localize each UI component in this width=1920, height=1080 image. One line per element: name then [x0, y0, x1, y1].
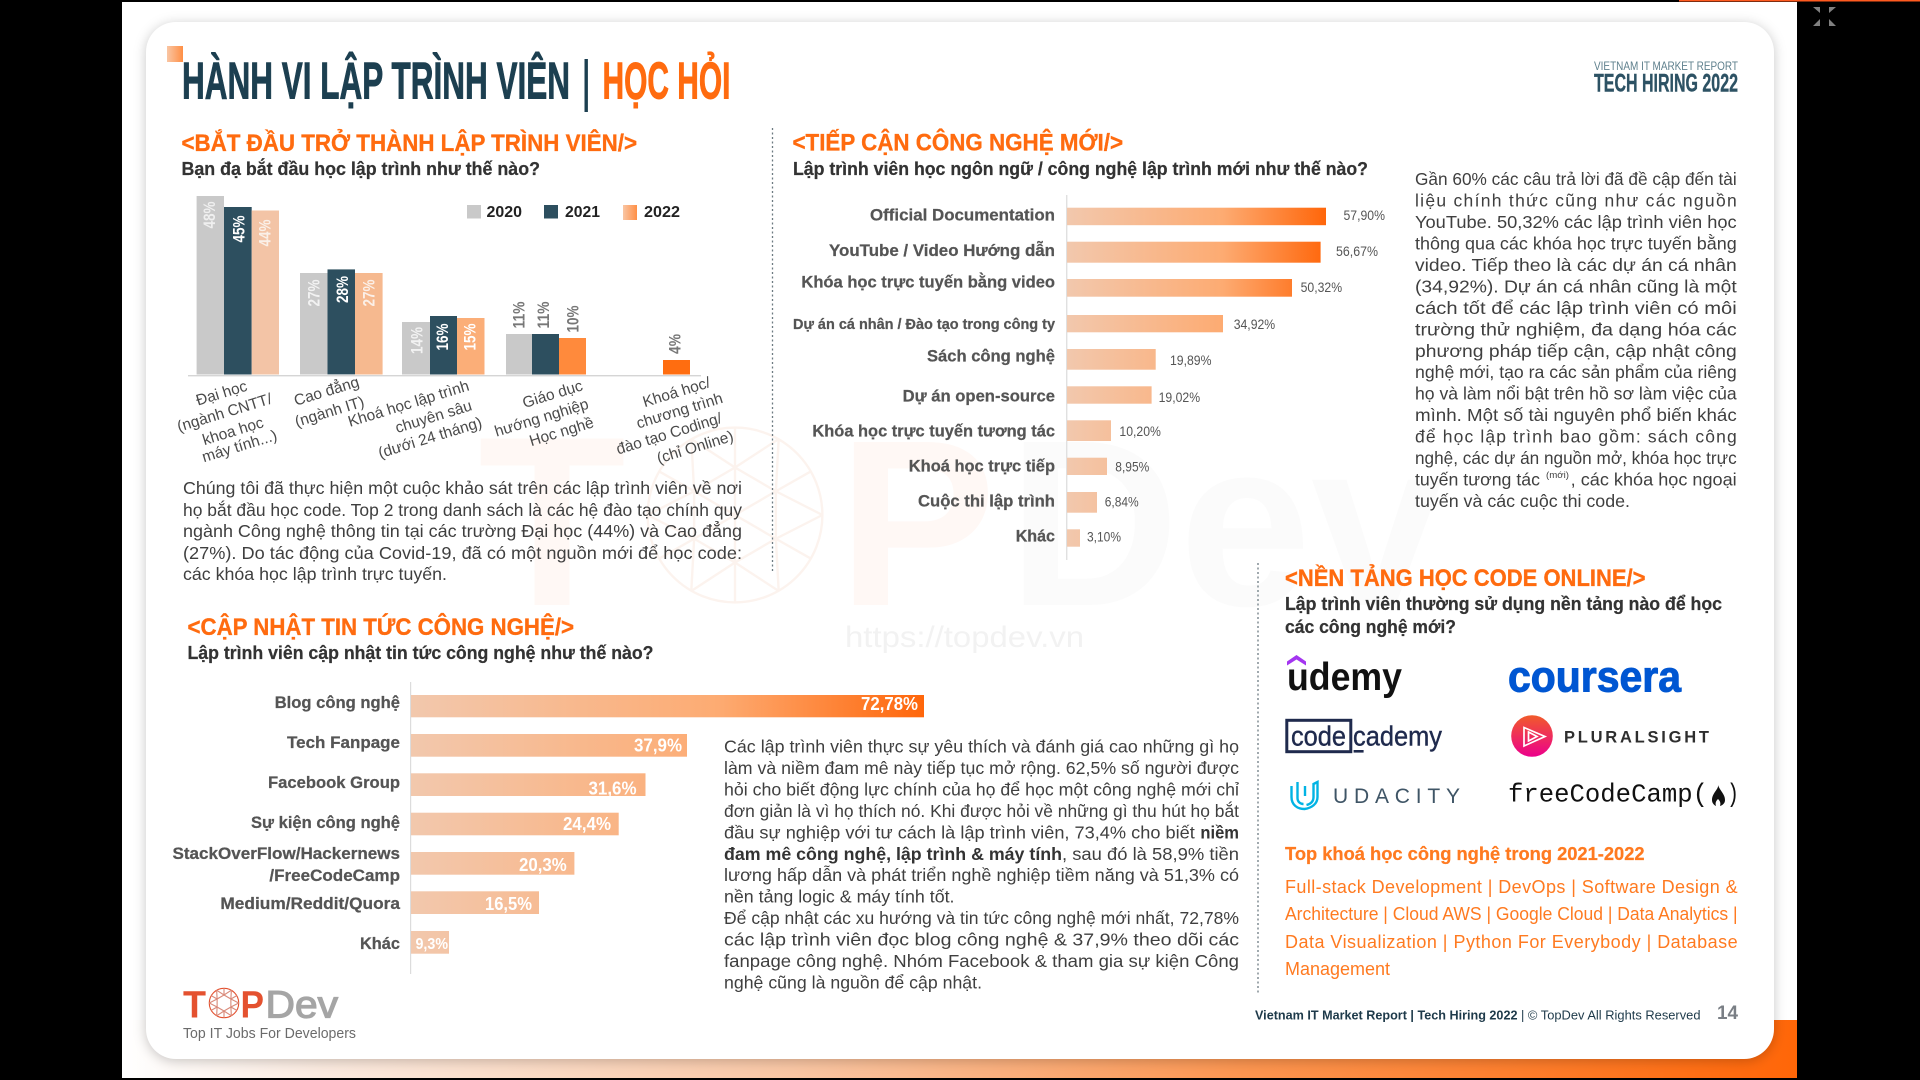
- paragraph: [183, 478, 742, 584]
- paragraph: trường thử nghiệm, đa dạng hóa các: [1415, 319, 1737, 339]
- bar values: [201, 201, 685, 354]
- watermark letter T: T: [478, 387, 626, 657]
- bar values: 37,9%: [634, 735, 682, 756]
- heading: <NỀN TẢNG HỌC CODE ONLINE/>: [1285, 563, 1646, 592]
- report badge: [1594, 59, 1739, 97]
- top courses list: Data Visualization | Python For Everybody | Database: [1285, 932, 1738, 952]
- bar values: 27%: [360, 279, 378, 307]
- category labels: Khóa học trực tuyến bằng video: [801, 273, 1055, 292]
- icon: collapse arrows: [1813, 7, 1836, 26]
- category labels: StackOverFlow/Hackernews: [172, 844, 400, 863]
- bar chart: where developers started: [175, 196, 736, 467]
- bars: [197, 196, 690, 374]
- bar values: 11%: [535, 301, 553, 328]
- subheading: Bạn đạ bắt đầu học lập trình như thế nào?: [182, 158, 540, 179]
- logo letter P: P: [240, 984, 264, 1026]
- paragraph: cách tốt để các lập trình viên có môi: [1415, 298, 1737, 318]
- bar values: 57,90%: [1344, 208, 1385, 223]
- bars: [411, 695, 924, 954]
- paragraph: ngành Công nghệ thông tin tại các trường Đại học (44%) và Cao đẳng: [183, 520, 742, 541]
- footer report name: Vietnam IT Market Report | Tech Hiring 2022: [1255, 1007, 1518, 1022]
- logo: codecademy: code: [1291, 720, 1346, 752]
- orange bottom band: [122, 1020, 1797, 1078]
- bar values: 44%: [256, 219, 274, 247]
- heading: <CẬP NHẬT TIN TỨC CÔNG NGHỆ/>: [188, 613, 574, 641]
- logo: freeCodeCamp: ): [1727, 780, 1739, 810]
- category labels: chương trình: [634, 390, 725, 432]
- paragraph: (34,92%). Dự án cá nhân cũng là một: [1415, 276, 1737, 296]
- bar values: 19,02%: [1159, 390, 1200, 405]
- paragraph: đơn giản là vì họ thích nó. Khi được hỏi về những gì thu hút họ bắt: [724, 800, 1239, 821]
- category labels: [172, 693, 401, 953]
- title text orange: HỌC HỎI: [602, 52, 730, 111]
- category labels: Medium/Reddit/Quora: [220, 894, 401, 913]
- paragraph: họ và làm nổi bật trên hồ sơ làm việc của: [1415, 384, 1737, 404]
- category labels: (ngành CNTT/: [175, 391, 275, 436]
- subheading: các công nghệ mới?: [1285, 616, 1456, 637]
- top courses list: Architecture | Cloud AWS | Google Cloud | Data Analytics |: [1285, 904, 1738, 924]
- logo: pluralsight: PLURALSIGHT: [1564, 729, 1709, 747]
- top courses heading: Top khoá học công nghệ trong 2021-2022: [1285, 843, 1645, 864]
- axis: [1066, 195, 1067, 560]
- paragraph: nghệ, các dự án nguồn mở, khóa học trực: [1415, 448, 1737, 468]
- bar values: 16,5%: [485, 893, 532, 914]
- logo: coursera: coursera: [1508, 652, 1681, 702]
- paragraph: lương hấp dẫn và phát triển nghề nghiệp tiềm năng và 51,3% có: [724, 864, 1239, 885]
- logo: codecademy: cademy: [1353, 720, 1442, 752]
- paragraph: tuyến tương tác: [1415, 470, 1540, 490]
- subheading: [1285, 593, 1722, 637]
- category labels: Tech Fanpage: [287, 733, 400, 752]
- category labels: (ngành IT): [293, 394, 366, 431]
- category labels: Dự án cá nhân / Đào tạo trong công ty: [793, 317, 1055, 333]
- bar values: 19,89%: [1170, 353, 1212, 368]
- subheading: Lập trình viên cập nhật tin tức công nghệ như thế nào?: [188, 642, 654, 663]
- category labels: Khoá học trực tiếp: [909, 457, 1055, 476]
- title accent square: [167, 46, 183, 62]
- logo: TopDev: [183, 984, 356, 1042]
- category labels: khoa học: [201, 414, 266, 449]
- watermark: [478, 387, 1443, 657]
- paragraph: (27%). Do tác động của Covid-19, đã có một nguồn mới để học code:: [183, 543, 742, 563]
- category labels: Khác: [360, 934, 400, 953]
- paragraph: họ bắt đầu học code. Top 2 trong danh sách là các hệ đào tạo chính quy: [183, 499, 742, 520]
- bars: [1067, 208, 1326, 547]
- top courses list: Full-stack Development | DevOps | Software Design &: [1285, 877, 1738, 897]
- bar values: 34,92%: [1234, 317, 1275, 332]
- heading: <TIẾP CẬN CÔNG NGHỆ MỚI/>: [792, 129, 1123, 157]
- bar values: [416, 693, 918, 953]
- logo: udacity: UDACITY: [1333, 785, 1460, 808]
- category labels: Cuộc thi lập trình: [918, 492, 1055, 511]
- top courses list: Management: [1285, 959, 1390, 979]
- bar values: 50,32%: [1301, 280, 1342, 295]
- category labels: Official Documentation: [870, 206, 1055, 225]
- paragraph: thông qua các khóa học trực tuyến bằng: [1415, 232, 1737, 253]
- report name: VIETNAM IT MARKET REPORT: [1594, 59, 1739, 73]
- category labels: Cao đẳng: [292, 373, 361, 410]
- bar values: 27%: [306, 279, 324, 307]
- logo letter T: T: [183, 984, 206, 1026]
- bar values: 20,3%: [519, 854, 567, 875]
- paragraph: Để cập nhật các xu hướng và tin tức công nghệ mới nhất, 72,78%: [724, 908, 1239, 928]
- category labels: Facebook Group: [268, 773, 400, 792]
- bar values: 72,78%: [861, 693, 918, 714]
- category labels: Blog công nghệ: [275, 693, 400, 712]
- category labels: Dự án open-source: [903, 387, 1055, 406]
- bar values: 11%: [511, 301, 529, 328]
- bar values: 15%: [461, 323, 479, 351]
- category labels: Khóa học trực tuyến tương tác: [812, 422, 1055, 441]
- watermark letter P: P: [838, 391, 996, 656]
- category labels: /FreeCodeCamp: [269, 866, 400, 885]
- watermark globe: [648, 428, 822, 602]
- category labels: Đại học: [194, 378, 250, 410]
- panel: tech news: [172, 613, 1239, 992]
- paragraph: Các lập trình viên thực sự yêu thích và đánh giá cao những gì họ: [724, 737, 1239, 757]
- category labels: Học nghề: [527, 414, 596, 450]
- paragraph: Gần 60% các câu trả lời đã đề cập đến tài: [1415, 169, 1737, 189]
- category labels: chuyên sâu: [393, 397, 474, 437]
- category labels: (chỉ Online): [655, 428, 736, 467]
- report title: TECH HIRING 2022: [1594, 69, 1738, 97]
- heading: <BẮT ĐẦU TRỞ THÀNH LẬP TRÌNH VIÊN/>: [182, 128, 637, 157]
- logo globe: [209, 988, 239, 1018]
- title: [167, 46, 730, 112]
- bar values: 9,3%: [416, 936, 448, 953]
- paragraph: các lập trình viên đọc blog công nghệ & 37,9% theo dõi các: [724, 930, 1239, 950]
- paragraph: , các khóa học ngoại: [1571, 470, 1737, 490]
- category labels: hướng nghiệp: [493, 396, 591, 441]
- footer copyright: | © TopDev All Rights Reserved: [1521, 1007, 1700, 1022]
- paragraph: mình. Một số tài nguyên phổ biến khác: [1415, 405, 1737, 425]
- panel: online platforms: [1285, 563, 1739, 979]
- logo word Dev: Dev: [266, 984, 338, 1026]
- paragraph: Chúng tôi đã thực hiện một cuộc khảo sát trên các lập trình viên về nơi: [183, 478, 742, 498]
- paragraph: đam mê công nghệ, lập trình & máy tính: [724, 844, 1062, 864]
- paragraph: fanpage công nghệ. Nhóm Facebook & tham gia sự kiện Công: [724, 951, 1239, 971]
- legend: [467, 204, 680, 221]
- bar values: 31,6%: [588, 778, 636, 799]
- panel: approaching new technology: [792, 129, 1737, 560]
- paragraph: [724, 737, 1239, 992]
- logo: freeCodeCamp: freeCodeCamp(: [1508, 780, 1708, 810]
- watermark word Dev: Dev: [1008, 391, 1443, 656]
- paragraph: đầu sự nghiệp với tư cách là lập trình viên, 73,4% cho biết: [724, 822, 1195, 842]
- top progress line: [1679, 0, 1920, 2]
- title text dark: HÀNH VI LẬP TRÌNH VIÊN: [182, 52, 570, 111]
- paragraph: (mới): [1546, 470, 1569, 480]
- paragraph: phương pháp tiếp cận, cập nhật công: [1415, 341, 1737, 361]
- page number: 14: [1717, 1003, 1738, 1024]
- axis: [410, 682, 411, 974]
- paragraph: tuyến và các cuộc thi code.: [1415, 491, 1630, 511]
- logo: udacity: [1292, 782, 1460, 809]
- paragraph: nền tảng logic & máy tính tốt.: [724, 887, 954, 907]
- paragraph: để học lập trình bao gồm: sách công: [1415, 427, 1737, 447]
- axis: [188, 375, 701, 376]
- legend: 2022: [644, 204, 680, 221]
- panel: start as a developer: [175, 128, 742, 584]
- category labels: đào tạo Coding/: [614, 410, 725, 458]
- logo: udemy: udemy: [1287, 656, 1402, 699]
- bar values: 45%: [231, 215, 249, 243]
- bar values: 14%: [409, 327, 427, 354]
- bar values: 24,4%: [563, 813, 611, 834]
- category labels: máy tính...): [200, 427, 279, 466]
- bar values: 4%: [667, 334, 685, 354]
- bar values: 56,67%: [1336, 244, 1378, 259]
- logo: pluralsight: [1511, 715, 1709, 757]
- bar chart: news sources: [172, 682, 924, 974]
- category labels: Giáo dục: [521, 377, 585, 412]
- paragraph: nghệ cũng là nguồn để cập nhật.: [724, 972, 982, 992]
- bar values: 10,20%: [1119, 424, 1161, 439]
- category labels: [793, 206, 1055, 546]
- paragraph: làm và niềm đam mê này tiếp tục mở rộng. 62,5% số người được: [724, 758, 1239, 778]
- paragraph: YouTube. 50,32% các lập trình viên học: [1415, 212, 1737, 232]
- paragraph: các khóa học lập trình trực tuyến.: [183, 564, 447, 584]
- subheading: Lập trình viên học ngôn ngữ / công nghệ lập trình mới như thế nào?: [793, 158, 1368, 179]
- paragraph: niềm: [1200, 822, 1239, 842]
- bar values: 28%: [334, 276, 352, 303]
- bar values: 10%: [564, 305, 582, 333]
- category labels: Khoá học lập trình: [346, 378, 471, 431]
- paragraph: nghệ mới, tạo ra các sản phẩm của riêng: [1415, 362, 1737, 382]
- paragraph: hỏi cho biết động lực chính của họ để học một công nghệ mới chỉ: [724, 780, 1239, 800]
- watermark url: https://topdev.vn: [845, 621, 1084, 654]
- legend: 2021: [565, 204, 600, 221]
- paragraph: , sau đó là 58,9% tiền: [1062, 844, 1239, 864]
- bar values: 16%: [434, 323, 452, 351]
- footer: [1255, 1003, 1738, 1024]
- bar values: 48%: [201, 201, 219, 229]
- bar values: [1087, 208, 1385, 545]
- subheading: Lập trình viên thường sử dụng nền tảng nào để học: [1285, 593, 1722, 614]
- category labels: Sự kiện công nghệ: [251, 813, 400, 832]
- paragraph: [1415, 169, 1737, 511]
- legend: 2020: [486, 204, 522, 221]
- bar values: 3,10%: [1087, 530, 1121, 545]
- bar chart: learning sources: [793, 195, 1385, 560]
- category labels: Sách công nghệ: [927, 347, 1055, 366]
- category labels: YouTube / Video Hướng dẫn: [829, 241, 1055, 260]
- bar values: 6,84%: [1105, 495, 1139, 510]
- logo: codecademy: [1287, 720, 1442, 753]
- category labels: Khác: [1016, 527, 1055, 546]
- top courses list: [1285, 877, 1738, 979]
- paragraph: video. Tiếp theo là các dự án cá nhân: [1415, 255, 1737, 275]
- bar values: 8,95%: [1115, 460, 1149, 475]
- category labels: (dưới 24 tháng): [376, 414, 484, 462]
- paragraph: liệu chính thức cũng như các nguồn: [1415, 190, 1737, 210]
- category labels: Khoá học/: [641, 374, 713, 411]
- title separator: [584, 59, 588, 112]
- logo tagline: Top IT Jobs For Developers: [183, 1025, 356, 1042]
- category labels: [175, 373, 736, 467]
